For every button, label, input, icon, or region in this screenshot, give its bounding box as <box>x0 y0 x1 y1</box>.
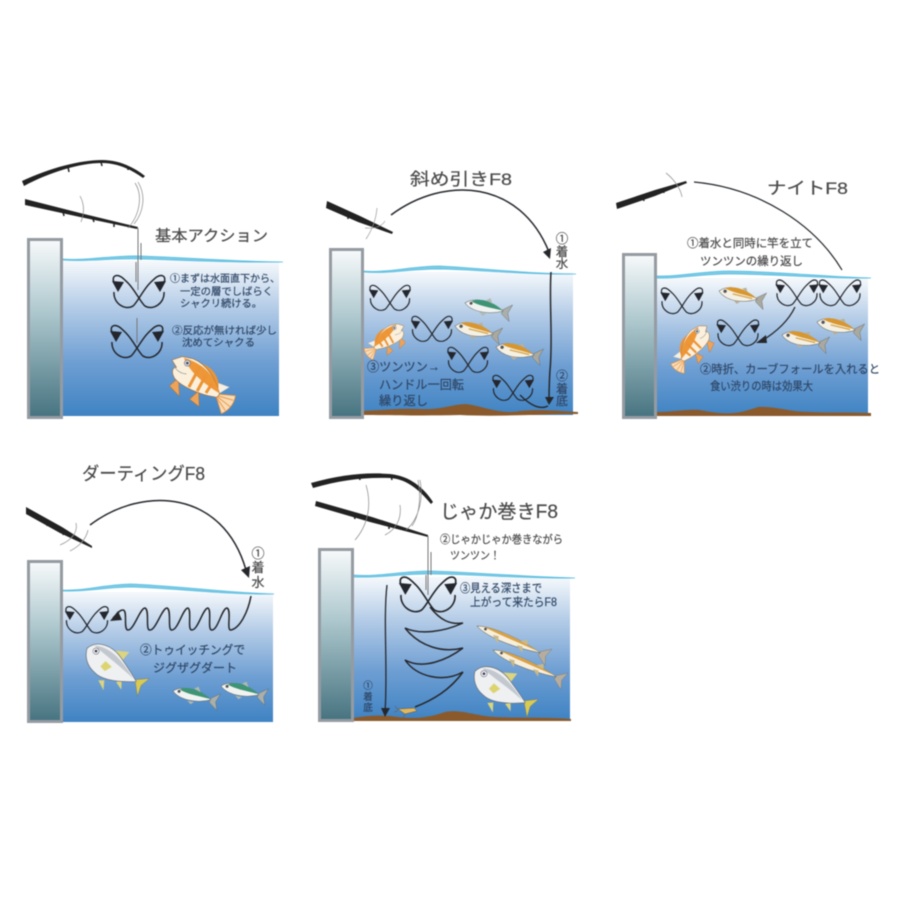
rod <box>26 507 92 548</box>
pillar <box>28 240 62 418</box>
label: bottom contact: 底 <box>363 703 373 714</box>
water surface <box>62 584 274 594</box>
seabed <box>363 404 578 416</box>
pillar <box>28 562 62 722</box>
step 2 text: 沈めてシャクる <box>182 336 255 349</box>
step 2 text <box>700 362 880 393</box>
water surface <box>656 271 871 278</box>
pillar <box>624 254 656 418</box>
panel: jaka-maki <box>311 473 575 728</box>
rod: lowered position <box>25 199 138 229</box>
panel: basic action <box>22 160 283 425</box>
zigzag retrieve path <box>405 607 463 707</box>
seabed <box>353 711 571 721</box>
title: 基本アクション <box>155 227 268 245</box>
rod motion lines <box>60 523 88 551</box>
step 2 text: 食い渋りの時は効果大 <box>710 379 813 393</box>
fish: rockfish <box>157 347 242 425</box>
fish: horse mackerel <box>453 317 544 366</box>
fish: barracuda <box>473 619 568 690</box>
step 2 text: ツンツン！ <box>450 550 500 562</box>
sinking line arrow <box>381 585 390 717</box>
step 1 text <box>170 272 280 310</box>
water <box>62 592 273 722</box>
fish: rockfish <box>360 318 413 367</box>
step 3 text: 繰り返し <box>379 394 428 408</box>
step 3 text: ハンドル一回転 <box>379 378 464 392</box>
water <box>656 278 868 416</box>
water <box>363 272 573 415</box>
fish: trevally <box>73 633 156 707</box>
fish: mackerel <box>171 676 269 710</box>
step 1 text: ①着水と同時に竿を立て <box>687 236 813 250</box>
step 2 text: ジグザグダート <box>153 660 237 675</box>
rod: raised position <box>22 160 145 186</box>
label: splashdown <box>556 232 569 271</box>
label: bottom contact <box>556 369 568 408</box>
figure-eight actions <box>660 280 862 346</box>
title: ナイトF8 <box>767 179 848 198</box>
figure-eight action <box>399 577 457 612</box>
step 1 text: 一定の層でしばらく <box>180 286 273 298</box>
step 1 text: ①まずは水面直下から、 <box>170 272 280 285</box>
label: bottom contact: ② <box>556 369 568 383</box>
step 2 text: ②反応が無ければ少し <box>172 324 277 337</box>
label: splashdown: 水 <box>251 575 265 590</box>
step 3 text: ③ツンツン→ <box>367 360 440 374</box>
seabed <box>656 407 871 416</box>
panel: night <box>616 173 880 418</box>
sinking line arrow <box>520 272 554 407</box>
figure-eight action <box>65 607 109 633</box>
step 2 text: ②トゥイッチングで <box>140 643 245 657</box>
lure: squid jig <box>394 706 417 718</box>
water <box>62 261 279 416</box>
label: bottom contact: ① <box>363 681 373 692</box>
fish: trevally <box>462 656 545 728</box>
label: splashdown <box>251 546 265 590</box>
water surface <box>363 266 576 274</box>
step 3 text <box>460 581 557 609</box>
figure-eight action 2 <box>110 325 164 358</box>
casting arc arrow <box>391 190 551 259</box>
rod motion lines <box>80 182 143 228</box>
title: じゃか巻きF8 <box>440 501 558 523</box>
water surface <box>62 256 283 262</box>
step 2 text <box>172 324 277 349</box>
label: splashdown: ① <box>251 546 265 561</box>
casting arc arrow <box>90 501 250 578</box>
figure-eight actions <box>369 285 534 400</box>
curve fall arrow <box>756 307 795 343</box>
label: splashdown: 水 <box>556 257 569 271</box>
casting arc <box>694 182 842 270</box>
step 2 text: ②じゃかじゃか巻きながら <box>440 532 563 546</box>
pillar <box>330 250 362 418</box>
step 3 text: 上がって来たらF8 <box>470 595 557 609</box>
fishing line <box>426 536 431 595</box>
fish: mackerel <box>463 293 513 322</box>
rod <box>616 181 687 209</box>
water <box>353 577 570 720</box>
rod <box>326 201 393 234</box>
fish: rockfish <box>666 319 721 380</box>
label: bottom contact: 着 <box>363 691 373 703</box>
rod: lowered position <box>315 501 428 537</box>
step 2 text <box>140 643 245 675</box>
rod motion lines <box>666 173 682 197</box>
label: splashdown: ① <box>556 232 569 246</box>
panel: diagonal retrieve <box>326 170 578 418</box>
rod motion lines <box>365 208 385 239</box>
label: bottom contact <box>363 681 373 714</box>
zigzag dart path arrow <box>110 596 251 630</box>
label: splashdown: 着 <box>251 560 265 575</box>
step 1 text <box>687 236 813 268</box>
fishing line <box>136 228 141 343</box>
title: ダーティングF8 <box>82 464 205 484</box>
step 2 text: ②時折、カーブフォールを入れると <box>700 362 880 376</box>
panel: darting <box>26 464 274 722</box>
title: 斜め引きF8 <box>410 170 512 189</box>
step 1 text: ツンツンの繰り返し <box>700 254 803 268</box>
label: splashdown: 着 <box>556 244 568 259</box>
label: bottom contact: 着 <box>556 381 568 396</box>
rod motion lines <box>355 480 421 540</box>
label: bottom contact: 底 <box>556 394 568 408</box>
fish: horse mackerel <box>717 282 865 354</box>
figure-eight action 1 <box>112 275 166 308</box>
step 1 text: シャクリ続ける。 <box>180 297 262 310</box>
step 3 text <box>367 360 464 408</box>
step 2 text <box>440 532 563 562</box>
step 3 text: ③見える深さまで <box>460 581 542 595</box>
water surface <box>353 571 575 578</box>
pillar <box>320 550 352 720</box>
rod: raised position <box>311 473 433 504</box>
